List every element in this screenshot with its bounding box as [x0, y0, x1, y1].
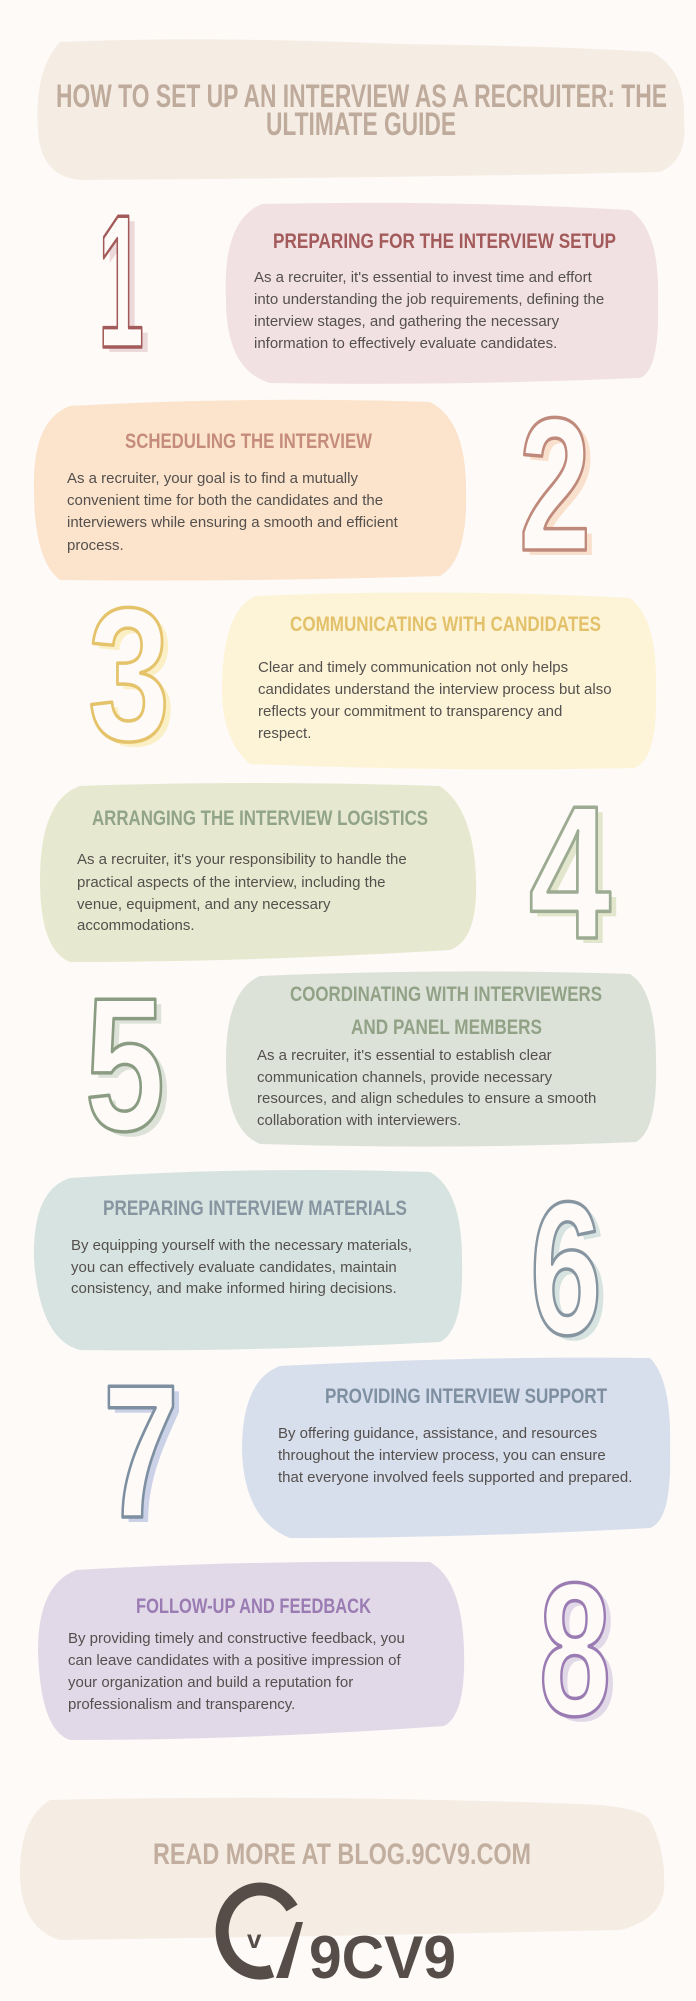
- title: [56, 78, 667, 142]
- text: 1: [98, 176, 144, 388]
- heading 1: PREPARING FOR THE INTERVIEW SETUP: [273, 230, 616, 253]
- body 8: can leave candidates with a positive impression of: [68, 1652, 402, 1669]
- number 3: 3: [88, 569, 170, 781]
- panel 2: scheduling the interview: [34, 400, 466, 580]
- heading 7: PROVIDING INTERVIEW SUPPORT: [325, 1385, 607, 1408]
- number 1: [98, 176, 150, 393]
- body 4: practical aspects of the interview, including the: [77, 874, 386, 891]
- body 4: As a recruiter, it's your responsibility to handle the: [77, 851, 407, 868]
- heading 8: FOLLOW-UP AND FEEDBACK: [136, 1595, 371, 1618]
- panel 1: preparing for the interview setup: [226, 203, 658, 384]
- number 5: 5: [91, 964, 171, 1176]
- body 4: accommodations.: [77, 917, 195, 934]
- body 3: Clear and timely communication not only helps: [258, 659, 568, 676]
- panel 3: communicating with candidates: [222, 592, 656, 769]
- body 1: into understanding the job requirements, defining the: [254, 291, 604, 308]
- footer text: READ MORE AT BLOG.9CV9.COM: [153, 1838, 531, 1871]
- body 4: venue, equipment, and any necessary: [77, 896, 331, 913]
- body 5: collaboration with interviewers.: [257, 1112, 461, 1129]
- body 8: professionalism and transparency.: [68, 1696, 295, 1713]
- body 3: respect.: [258, 725, 311, 742]
- number 6: 6: [530, 1163, 602, 1375]
- number 8: 8: [539, 1544, 611, 1756]
- panel 8: follow-up and feedback: [38, 1562, 464, 1740]
- title panel: [37, 39, 684, 180]
- number 4: 4: [529, 767, 611, 979]
- number 2: 2: [519, 379, 591, 591]
- body 5: communication channels, provide necessary: [257, 1069, 553, 1086]
- heading 5: COORDINATING WITH INTERVIEWERS: [290, 983, 602, 1006]
- body 6: consistency, and make informed hiring decisions.: [71, 1280, 397, 1297]
- panel 7: providing interview support: [242, 1358, 670, 1538]
- heading 3: COMMUNICATING WITH CANDIDATES: [290, 613, 601, 636]
- number 7: 7: [109, 1351, 185, 1563]
- number 3: 3: [94, 574, 176, 786]
- body 1: As a recruiter, it's essential to invest time and effort: [254, 269, 592, 286]
- number 8: 8: [545, 1549, 617, 1761]
- heading 2: SCHEDULING THE INTERVIEW: [125, 430, 372, 453]
- logo: 9cv9: [222, 1889, 456, 1991]
- body 3: candidates understand the interview process but also: [258, 681, 612, 698]
- number 4: 4: [535, 772, 617, 984]
- number 2: 2: [525, 384, 597, 596]
- panel 6: preparing interview materials: [34, 1170, 462, 1350]
- body 7: By offering guidance, assistance, and resources: [278, 1425, 597, 1442]
- heading 4: ARRANGING THE INTERVIEW LOGISTICS: [92, 807, 428, 830]
- footer panel: [20, 1798, 664, 1940]
- body 7: throughout the interview process, you can ensure: [278, 1447, 606, 1464]
- logo: 9cv9: 9CV9: [309, 1924, 456, 1991]
- heading 5: AND PANEL MEMBERS: [351, 1016, 542, 1039]
- body 2: process.: [67, 537, 124, 554]
- body 7: that everyone involved feels supported and prepared.: [278, 1469, 632, 1486]
- body 3: reflects your commitment to transparency and: [258, 703, 562, 720]
- logo: 9cv9: v: [247, 1924, 262, 1954]
- body 2: convenient time for both the candidates and the: [67, 492, 383, 509]
- number 7: 7: [103, 1346, 179, 1558]
- body 6: By equipping yourself with the necessary materials,: [71, 1237, 412, 1254]
- body 8: By providing timely and constructive feedback, you: [68, 1630, 405, 1647]
- title: ULTIMATE GUIDE: [266, 106, 456, 142]
- body 1: interview stages, and gathering the necessary: [254, 313, 560, 330]
- heading 6: PREPARING INTERVIEW MATERIALS: [103, 1197, 407, 1220]
- body 8: your organization and build a reputation for: [68, 1674, 353, 1691]
- panel 4: arranging the interview logistics: [40, 783, 476, 962]
- text: 1: [104, 181, 150, 393]
- body 1: information to effectively evaluate candidates.: [254, 335, 557, 352]
- number 5: 5: [85, 959, 165, 1171]
- body 5: As a recruiter, it's essential to establish clear: [257, 1047, 552, 1064]
- panel 5: coordinating with interviewers: [226, 971, 656, 1147]
- heading 5: [290, 983, 602, 1039]
- number 6: 6: [536, 1168, 608, 1380]
- body 2: As a recruiter, your goal is to find a mutually: [67, 470, 358, 487]
- body 6: you can effectively evaluate candidates, maintain: [71, 1259, 397, 1276]
- body 5: resources, and align schedules to ensure a smooth: [257, 1090, 596, 1107]
- body 2: interviewers while ensuring a smooth and efficient: [67, 514, 399, 531]
